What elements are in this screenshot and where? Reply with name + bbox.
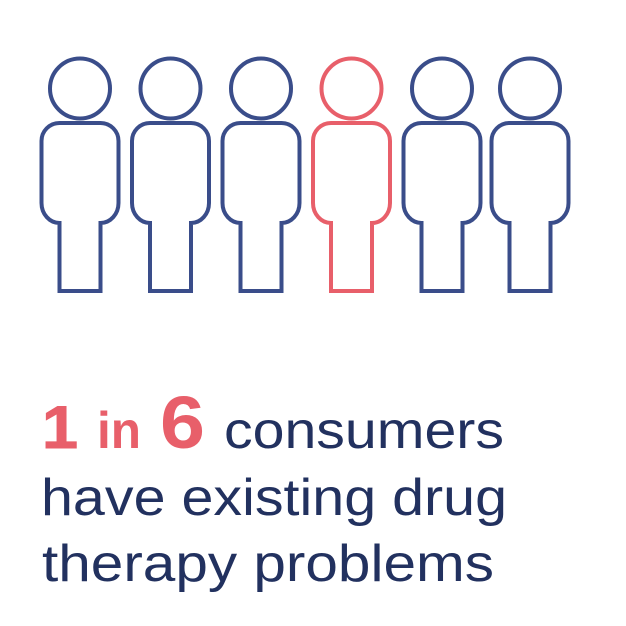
number 1: 1: [42, 394, 78, 461]
word consumers: consumers: [224, 402, 504, 460]
person 1: [42, 58, 118, 291]
person 6: [492, 58, 568, 291]
headline text: [41, 381, 507, 593]
person 4: highlighted: [313, 58, 390, 291]
person 3: [222, 58, 300, 291]
line 3: therapy problems: [42, 535, 494, 593]
number 6: 6: [160, 381, 205, 464]
person 2: [132, 58, 209, 291]
line 2: have existing drug: [41, 469, 507, 527]
person 5: [404, 58, 480, 291]
word in: in: [97, 402, 141, 460]
